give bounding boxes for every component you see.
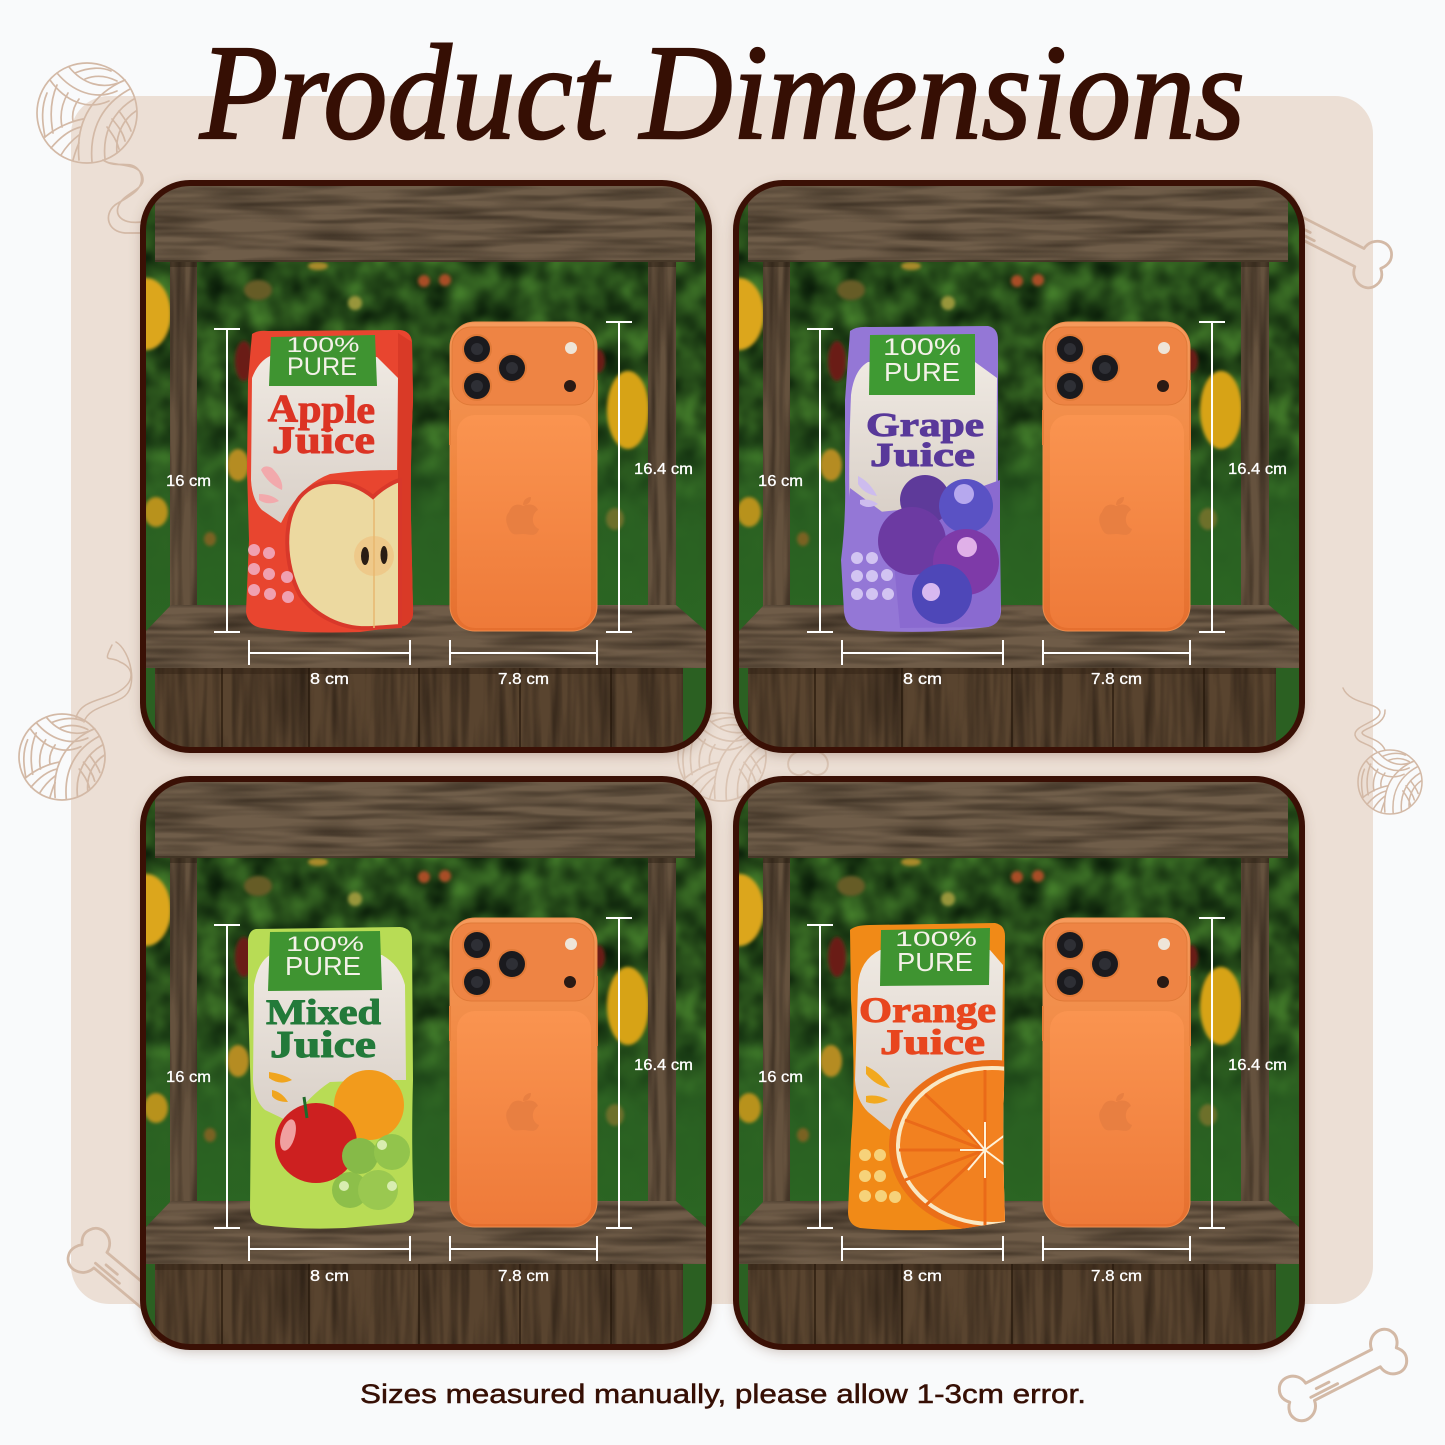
icon: yarn ball left (19, 642, 132, 800)
dimension labels: 8 cm (310, 1268, 349, 1285)
panel: grape juice (714, 180, 1305, 754)
label text: 100% (286, 334, 360, 357)
dimension lines (807, 918, 1225, 1261)
stand scene (714, 180, 1305, 752)
dimension labels: 7.8 cm (1091, 671, 1142, 688)
dimension labels: 16 cm (166, 1069, 211, 1086)
product: grape juice box: Juice (870, 437, 975, 474)
panel border (143, 183, 709, 750)
icon: yarn ball top left (37, 63, 143, 233)
dimension labels (758, 461, 1287, 688)
dimension labels: 7.8 cm (1091, 1268, 1142, 1285)
dimension labels: 7.8 cm (498, 1268, 549, 1285)
product: orange juice box: PURE (897, 947, 973, 977)
reference phone (449, 918, 598, 1227)
dimension labels: 7.8 cm (498, 671, 549, 688)
icon: yarn ball centre (678, 713, 766, 801)
dimension labels: 16.4 cm (1228, 1057, 1287, 1074)
product: apple juice box: PURE (287, 353, 357, 381)
panel border (736, 779, 1302, 1347)
panel shadow (736, 783, 1302, 1350)
product: mixed juice box (248, 927, 414, 1229)
dimension labels: 8 cm (903, 671, 942, 688)
product: orange juice box (848, 923, 1005, 1230)
beige backing panel (71, 96, 1373, 1304)
icon: bone centre gap (788, 665, 828, 775)
stand scene (121, 180, 712, 752)
product: grape juice box: PURE (884, 357, 960, 387)
dimension labels (166, 461, 693, 688)
reference phone (1042, 918, 1191, 1227)
product: apple juice box (246, 330, 413, 632)
product: mixed juice box: Juice (270, 1024, 376, 1066)
dimension labels (166, 1057, 693, 1285)
icon: bone top right (1254, 188, 1396, 292)
dimension labels (758, 1057, 1287, 1285)
panel border (143, 779, 709, 1347)
product: orange juice box: Orange (859, 990, 996, 1030)
dimension lines (214, 918, 632, 1261)
footer note: Sizes measured manually, please allow 1-3cm error. (360, 1379, 1086, 1409)
product: grape juice box: Grape (866, 407, 984, 444)
product: mixed juice box: Mixed (266, 992, 381, 1032)
dimension lines (807, 322, 1225, 665)
panel shadow (143, 783, 709, 1350)
product: mixed juice box: PURE (285, 951, 361, 981)
dimension labels: 16.4 cm (634, 1057, 693, 1074)
title: Product Dimensions (199, 18, 1245, 168)
dimension labels: 16 cm (758, 473, 803, 490)
product: apple juice box: Juice (272, 419, 375, 462)
dimension labels: 16 cm (758, 1069, 803, 1086)
panel shadow (736, 187, 1302, 754)
dimension labels: 16.4 cm (634, 461, 693, 478)
panel: orange juice (714, 776, 1305, 1350)
dimension labels: 8 cm (310, 671, 349, 688)
panel shadow (143, 187, 709, 754)
reference phone (1042, 322, 1191, 631)
icon: bone bottom left (62, 1223, 198, 1347)
panel: mixed juice (121, 776, 712, 1350)
reference phone (449, 322, 598, 631)
stand scene (121, 776, 712, 1348)
product: grape juice box (841, 326, 1001, 632)
product: orange juice box: Juice (880, 1022, 985, 1062)
panel: apple juice (121, 180, 712, 754)
label text: 100% (883, 334, 961, 361)
icon: bone bottom right (1275, 1325, 1411, 1425)
product: apple juice box: Apple (268, 387, 375, 432)
dimension lines (214, 322, 632, 665)
panel border (736, 183, 1302, 750)
dimension labels: 16.4 cm (1228, 461, 1287, 478)
stand scene (714, 776, 1305, 1348)
label text: 100% (286, 933, 364, 956)
dimension labels: 16 cm (166, 473, 211, 490)
icon: yarn ball right (1343, 688, 1422, 814)
label text: 100% (895, 928, 977, 951)
dimension labels: 8 cm (903, 1268, 942, 1285)
